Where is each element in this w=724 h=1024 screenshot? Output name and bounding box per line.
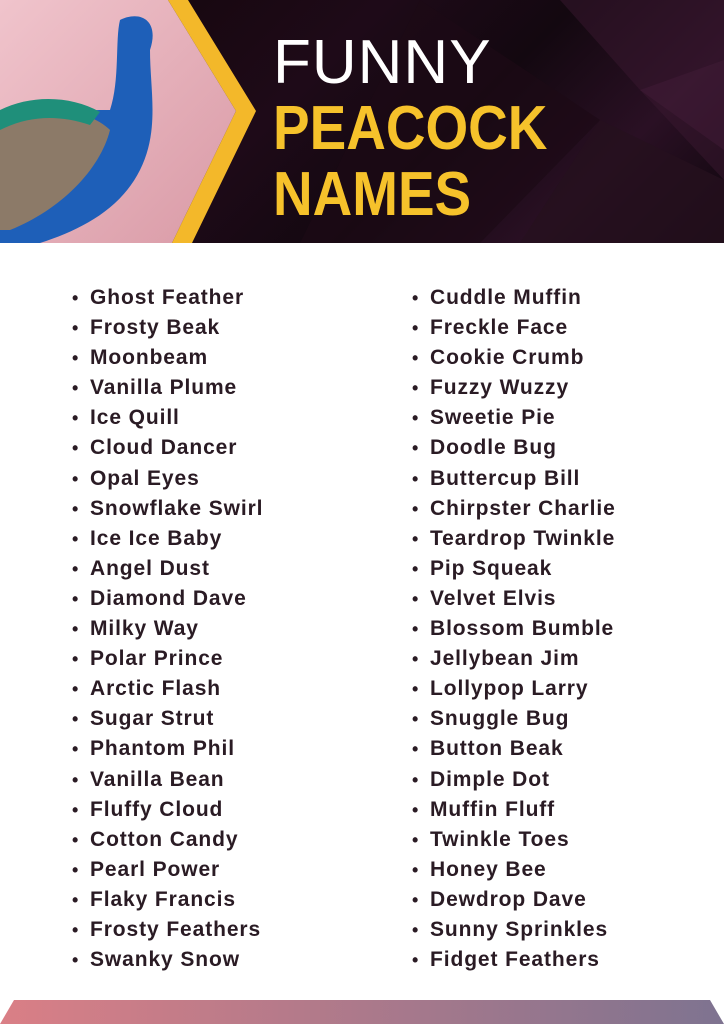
list: left column: Vanilla Bean <box>90 768 225 790</box>
list: left column: Milky Way <box>90 617 199 640</box>
list: right column: Dewdrop Dave <box>430 888 587 911</box>
list: left column: Diamond Dave <box>90 587 247 610</box>
list: left column: Polar Prince <box>90 647 223 670</box>
footer gradient bar <box>0 1000 724 1024</box>
list: left column: Ice Quill <box>90 406 180 429</box>
title <box>273 28 547 229</box>
list: right column: Cuddle Muffin <box>430 286 582 309</box>
title: NAMES <box>273 160 471 229</box>
title: FUNNY <box>273 28 492 97</box>
list: right column: Fuzzy Wuzzy <box>430 376 569 399</box>
list: left column: Ice Ice Baby <box>90 527 222 550</box>
list: left column: Swanky Snow <box>90 948 240 971</box>
list: left column: Moonbeam <box>90 346 208 369</box>
list: left column: Fluffy Cloud <box>90 798 223 821</box>
list: left column: Angel Dust <box>90 557 210 580</box>
title: PEACOCK <box>273 94 547 163</box>
list: right column: Freckle Face <box>430 316 568 339</box>
list: right column: Twinkle Toes <box>430 828 570 851</box>
list: right column: Dimple Dot <box>430 768 550 790</box>
list: left column: Flaky Francis <box>90 888 236 911</box>
list: right column <box>412 286 616 971</box>
list: right column: Blossom Bumble <box>430 617 614 640</box>
list: left column: Ghost Feather <box>90 286 244 309</box>
list: right column: Pip Squeak <box>430 557 552 580</box>
icon: peacock body <box>0 16 153 243</box>
list: right column: Teardrop Twinkle <box>430 527 615 550</box>
list: right column: Lollypop Larry <box>430 677 588 700</box>
list: left column: Opal Eyes <box>90 467 200 490</box>
list: left column: Arctic Flash <box>90 677 221 700</box>
list: right column: Jellybean Jim <box>430 647 579 670</box>
list: right column: Snuggle Bug <box>430 707 569 730</box>
list: right column: Button Beak <box>430 737 564 760</box>
header banner <box>0 0 724 243</box>
list: left column: Cotton Candy <box>90 828 238 851</box>
photo: peacock in chevron <box>0 0 256 243</box>
list: right column: Chirpster Charlie <box>430 497 616 520</box>
list: right column: Sunny Sprinkles <box>430 918 608 941</box>
list: left column: Frosty Feathers <box>90 918 261 941</box>
list: left column: Phantom Phil <box>90 737 235 760</box>
list: left column: Pearl Power <box>90 858 220 881</box>
list: right column: Doodle Bug <box>430 436 557 459</box>
list: left column: Snowflake Swirl <box>90 497 263 520</box>
list: right column: Fidget Feathers <box>430 948 600 971</box>
background facets <box>560 0 724 243</box>
list: left column: Sugar Strut <box>90 707 214 730</box>
list: right column: Cookie Crumb <box>430 346 584 369</box>
list: right column: Velvet Elvis <box>430 587 556 610</box>
list: left column: Frosty Beak <box>90 316 220 339</box>
list: left column: Vanilla Plume <box>90 376 237 399</box>
list: right column: Sweetie Pie <box>430 406 555 429</box>
list: right column: Buttercup Bill <box>430 467 580 490</box>
list: right column: Muffin Fluff <box>430 798 555 821</box>
list: left column <box>72 286 263 971</box>
list: right column: Honey Bee <box>430 858 547 881</box>
list: left column: Cloud Dancer <box>90 436 237 459</box>
